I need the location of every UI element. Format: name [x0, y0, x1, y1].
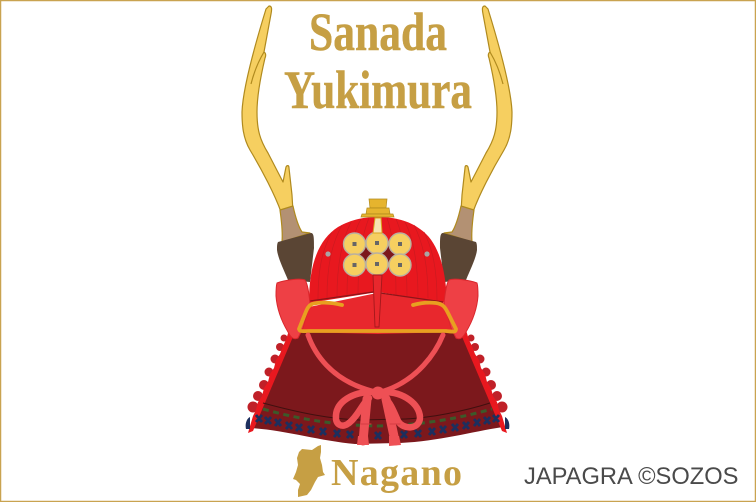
neck guard: dark red shikoro	[246, 330, 509, 444]
visor	[299, 275, 457, 334]
credit: JAPAGRA ©SOZOS	[524, 464, 738, 490]
lacing bumps	[248, 334, 508, 412]
title: Sanada Yukimura: Sanada	[309, 2, 447, 62]
navy end caps	[246, 417, 509, 429]
gold crown finial	[361, 199, 394, 217]
red edge right	[460, 330, 507, 433]
navy cross stitches	[256, 415, 499, 439]
crest backing	[354, 244, 400, 265]
label: Nagano: Nagano	[331, 452, 462, 494]
left side flap	[276, 279, 310, 339]
title: Sanada Yukimura: Yukimura	[284, 60, 472, 120]
title: Sanada Yukimura	[284, 2, 472, 120]
red edge left	[248, 330, 295, 433]
orange visor trim	[299, 303, 456, 332]
icon: six coins crest	[344, 232, 411, 276]
hanging tails	[363, 399, 367, 441]
rivets	[325, 251, 331, 257]
cream centre stripe	[373, 218, 382, 233]
seam line	[263, 403, 490, 420]
icon: left antler	[242, 6, 314, 282]
right side flap	[444, 279, 478, 339]
right loop	[384, 392, 420, 427]
tied cord	[308, 335, 443, 446]
helmet bowl	[309, 199, 447, 303]
icon: Nagano map	[293, 445, 325, 497]
green stitching	[263, 409, 492, 426]
left loop	[336, 392, 372, 426]
icon: right antler	[440, 6, 512, 282]
